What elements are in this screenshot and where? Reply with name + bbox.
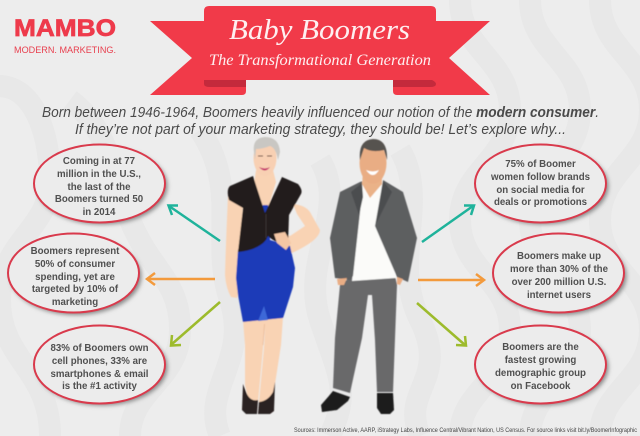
callout: 83% own cell phones: 83% of Boomers own — [51, 343, 149, 354]
callout: fastest growing on Facebook: on Facebook — [511, 381, 571, 392]
logo: Mambo: MODERN. MARKETING. — [14, 45, 116, 55]
callout: 75% follow brands — [475, 144, 608, 224]
jacket — [330, 180, 417, 282]
intro text — [42, 105, 599, 138]
callout: 77 million: the last of the — [68, 182, 131, 193]
neck and chest — [254, 170, 276, 215]
callout: 50% of spending: spending, yet are — [35, 272, 115, 283]
arrow: green right — [417, 303, 466, 346]
shoes — [321, 391, 350, 412]
arrow: teal right — [422, 206, 474, 242]
head — [360, 142, 386, 184]
logo: Mambo — [14, 15, 116, 55]
subtitle: The Transformational Generation — [209, 52, 431, 69]
dress — [236, 205, 295, 322]
callout: fastest growing on Facebook: Boomers are the — [502, 342, 579, 353]
callout: fastest growing on Facebook: demographic group — [495, 368, 586, 379]
arrow: green left — [171, 302, 220, 346]
callout: 30% of internet users: over 200 million U.S. — [512, 277, 607, 288]
callout: 75% follow brands: deals or promotions — [494, 197, 587, 208]
figure: man — [321, 139, 417, 414]
arrow: orange left — [147, 273, 215, 285]
arrow: orange right — [418, 274, 484, 286]
intro text: If they’re not part of your marketing strategy, they should be! Let’s explore why... — [75, 122, 566, 138]
arrow: teal left — [168, 206, 220, 241]
right arm — [273, 204, 320, 253]
logo: Mambo: MAMBO — [14, 15, 116, 42]
trousers — [333, 276, 397, 393]
callout: 75% follow brands: on social media for — [496, 185, 585, 196]
callout: 75% follow brands: women follow brands — [490, 172, 590, 183]
smile — [366, 170, 379, 175]
head — [254, 140, 276, 176]
callout: 77 million — [34, 144, 168, 224]
callout: fastest growing on Facebook — [475, 326, 608, 406]
intro text: Born between 1946-1964, Boomers heavily influenced our notion of the modern consumer. — [42, 105, 599, 121]
left arm — [225, 196, 243, 298]
callout: 77 million: Coming in at 77 — [63, 156, 135, 167]
callout: 77 million: Boomers turned 50 — [55, 194, 143, 205]
title: Baby Boomers: Baby Boomers — [229, 14, 410, 46]
callout: 30% of internet users: internet users — [527, 290, 591, 301]
figure: woman — [225, 137, 320, 414]
hair — [254, 137, 280, 160]
callout: 77 million: in 2014 — [83, 207, 116, 218]
callout: 30% of internet users: Boomers make up — [517, 251, 601, 262]
title ribbon banner — [150, 6, 490, 95]
shirt — [352, 178, 396, 281]
callout: 30% of internet users — [493, 234, 626, 315]
callout: 77 million: million in the U.S., — [57, 169, 141, 180]
shoes — [242, 384, 258, 414]
callout: fastest growing on Facebook: fastest growing — [505, 355, 576, 366]
hair — [360, 139, 387, 160]
callout: 50% of spending: marketing — [52, 297, 98, 308]
jacket — [228, 176, 302, 252]
neck — [362, 172, 382, 198]
legs — [243, 317, 283, 402]
callout: 83% own cell phones: is the #1 activity — [62, 381, 138, 392]
callout: 83% own cell phones: smartphones & email — [51, 369, 148, 380]
callout: 83% own cell phones: cell phones, 33% are — [52, 356, 148, 367]
callout: 50% of spending: Boomers represent — [31, 246, 120, 257]
callout: 75% follow brands: 75% of Boomer — [505, 159, 576, 170]
callout: 83% own cell phones — [34, 326, 168, 406]
callout: 50% of spending: 50% of consumer — [35, 259, 115, 270]
hand — [274, 232, 291, 250]
hands in pockets — [337, 277, 403, 285]
callout: 30% of internet users: more than 30% of the — [510, 264, 609, 275]
smile — [259, 167, 270, 170]
callout: 50% of spending: targeted by 10% of — [32, 284, 119, 295]
callout: 50% of spending — [8, 234, 142, 315]
